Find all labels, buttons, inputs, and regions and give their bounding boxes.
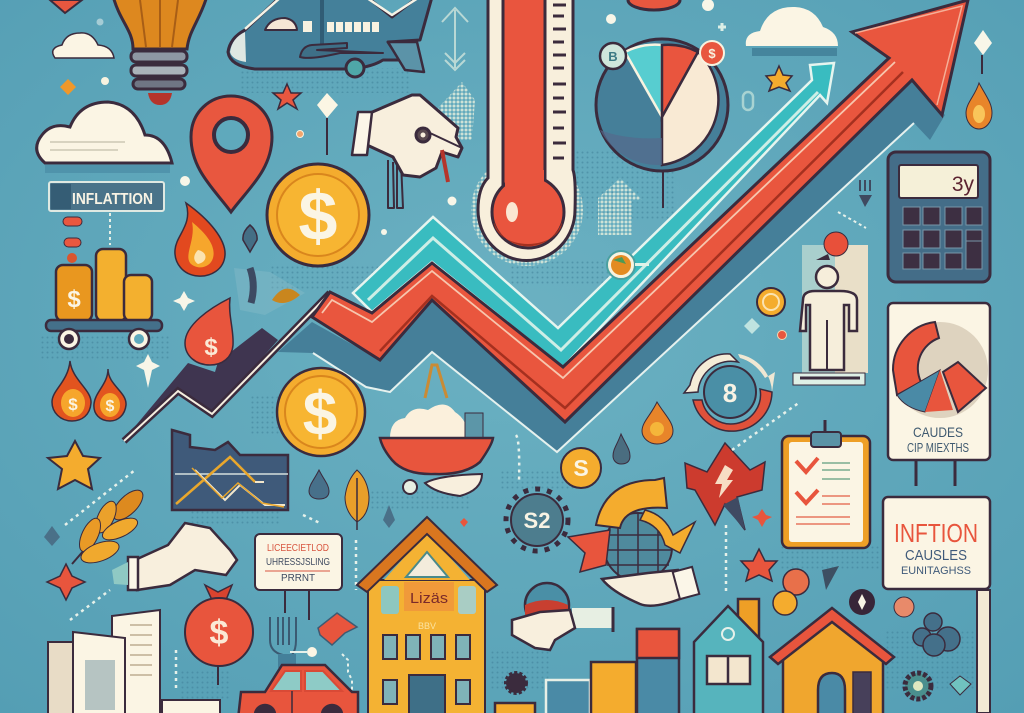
main chart: dark teal shadow behind red arrow <box>278 80 945 452</box>
icon: twin dollar flames <box>52 361 126 421</box>
icon: faint dotted house arrow <box>436 82 475 140</box>
sign: small text sign <box>255 534 342 620</box>
chart: pie <box>596 39 728 208</box>
icon: twin dollar flames: $ <box>106 398 115 415</box>
icon: large gold coin <box>277 368 365 456</box>
panel: pie causes sign <box>888 303 990 486</box>
panel: open documents <box>48 610 220 713</box>
icon: small star <box>273 84 301 109</box>
icon: right cloud <box>746 7 838 56</box>
panel: person figure <box>793 232 868 385</box>
icon: teal house <box>694 599 763 713</box>
panel: pie causes sign: CAUDES <box>913 424 963 440</box>
sign: small text sign: LICEECIETLOD <box>267 543 329 554</box>
icon: clipboard checklist <box>782 420 870 548</box>
label: inflation: INFLATTION <box>72 191 153 208</box>
icon: small dark drop <box>243 225 257 252</box>
icon: orange house <box>770 608 894 713</box>
icon: orange drop, dark drop, coin: S <box>573 455 589 481</box>
icon: red money bag: $ <box>210 614 229 652</box>
icon: hand with faucet <box>512 583 614 650</box>
panel: inflation causes sign: INFTION <box>894 518 978 548</box>
icon: globe with arrow and hand <box>568 478 699 606</box>
icon: red star burst <box>685 443 765 530</box>
icon: location pin <box>191 96 272 212</box>
main chart: cyan arrow line <box>353 63 834 367</box>
icon: red car <box>238 665 358 713</box>
chart: small line chart <box>172 430 288 510</box>
icon: pointing hand <box>112 523 237 590</box>
icon: white sparkles <box>136 176 456 388</box>
icon: small diamonds <box>44 505 468 600</box>
icon: faint dotted house <box>598 178 642 235</box>
icon: hand holding keys <box>352 95 462 208</box>
label: inflation <box>49 182 164 211</box>
icon: red dollar drop: $ <box>204 334 218 361</box>
icon: twin dollar flames: $ <box>68 395 78 414</box>
icon: node on cyan line <box>607 251 649 279</box>
icon: dark blob cluster <box>913 613 960 656</box>
main chart: dark zigzag start <box>122 293 330 442</box>
chart: pie: $ <box>708 46 716 61</box>
icon: small cloud <box>53 33 114 58</box>
icon: gold star left <box>48 441 100 489</box>
main chart: red arrow line <box>312 0 968 422</box>
building: main yellow building: BBV <box>418 621 436 631</box>
icon: top red star <box>50 0 82 13</box>
icon: faint up arrow <box>442 8 468 70</box>
icon: red money bag <box>185 585 253 685</box>
icon: orange drop, dark drop, coin <box>561 402 673 488</box>
icon: spark and small flame <box>966 30 992 129</box>
icon: gold dollar coin <box>267 164 369 266</box>
building: main yellow building: Lizäs <box>410 590 448 607</box>
icon: large cloud <box>37 102 172 173</box>
icon: dark small gear bottom <box>506 673 526 693</box>
icon: faint chain link <box>743 92 753 110</box>
icon: barrels on cart: $ <box>67 286 81 313</box>
panel: inflation causes sign: CAUSLES <box>905 547 967 564</box>
panel: inflation causes sign <box>883 497 990 713</box>
icon: large gold coin: $ <box>303 380 337 449</box>
icon: gear badge: S2 <box>524 508 550 533</box>
building: main yellow building <box>357 517 497 713</box>
icon: gold dollar coin: $ <box>299 177 337 255</box>
icon: red dollar drop <box>185 298 233 365</box>
panel: inflation causes sign: EUNITAGHSS <box>901 565 971 577</box>
icon: label connector <box>63 213 110 247</box>
icon: light bulb <box>113 0 207 105</box>
icon: fork and red shape <box>270 613 357 690</box>
icon: small star and orbs <box>741 509 914 617</box>
icon: calculator: 3y <box>952 173 974 196</box>
icon: wheat branch <box>72 485 148 567</box>
buildings: bar blocks <box>495 629 679 713</box>
icon: water drop and wheat <box>309 470 369 530</box>
icon: bowl with foam <box>380 365 493 496</box>
icon: small gold coin and sparkle <box>744 288 786 340</box>
icon: barrels on cart <box>46 249 162 349</box>
icon: flame <box>175 203 225 276</box>
chart: pie: B <box>608 49 618 64</box>
icon: circular arrows badge: 8 <box>723 378 737 408</box>
icon: gear badge <box>506 489 568 551</box>
icon: faint sketch tag <box>234 268 305 315</box>
icon: small gear and spark <box>905 673 971 699</box>
icon: top red circle <box>606 0 726 31</box>
icon: diamond sparkle <box>60 18 109 95</box>
panel: pie causes sign: CIP MIEXTHS <box>907 440 969 455</box>
sign: small text sign: UHRESSJSLING <box>266 557 330 568</box>
icon: small down marker <box>838 180 872 228</box>
chart: thermometer <box>471 0 583 266</box>
sign: small text sign: PRRNT <box>281 573 315 584</box>
icon: airplane <box>228 0 432 77</box>
icon: circular arrows badge <box>684 354 775 431</box>
icon: calculator <box>888 152 990 282</box>
icon: cream diamond on stem <box>296 93 338 155</box>
icon: dotted connectors <box>65 402 800 688</box>
icon: gold star <box>766 66 792 91</box>
